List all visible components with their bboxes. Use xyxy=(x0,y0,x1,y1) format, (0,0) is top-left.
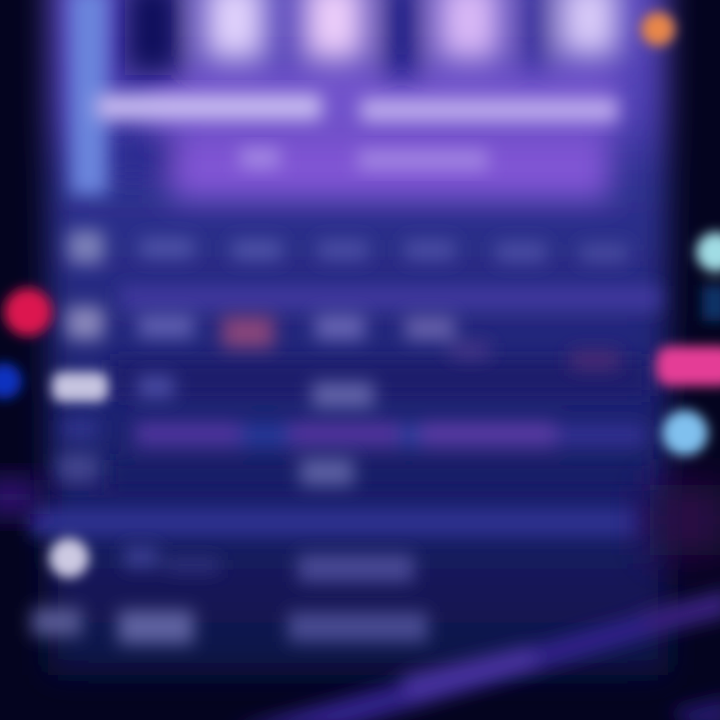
table: header row cells xyxy=(68,230,628,264)
left accent bar xyxy=(70,0,108,195)
icon: orange dot xyxy=(641,12,675,46)
panel: header glow xyxy=(105,70,620,200)
heading: title xyxy=(96,94,618,122)
icon: white circle xyxy=(49,538,89,578)
icon: blue dot xyxy=(0,363,22,399)
text block: footer row two xyxy=(32,608,428,644)
table: third row cells xyxy=(52,372,108,402)
icon: light blue dot xyxy=(662,410,708,456)
table: second row cells xyxy=(66,306,620,370)
table: third row text xyxy=(138,376,374,408)
right bottom glow xyxy=(650,485,720,555)
diagonal stripes xyxy=(230,588,720,720)
icon: pink pill xyxy=(656,346,720,386)
table: fourth row cells xyxy=(58,420,354,486)
icon: crimson dot xyxy=(4,288,52,336)
icon: cyan dot xyxy=(696,232,720,321)
header light columns xyxy=(125,0,618,75)
bottom left glow xyxy=(0,480,40,514)
table: row bands xyxy=(30,286,660,536)
text block: subtitle xyxy=(240,148,488,170)
text block: footer row one xyxy=(124,546,414,582)
